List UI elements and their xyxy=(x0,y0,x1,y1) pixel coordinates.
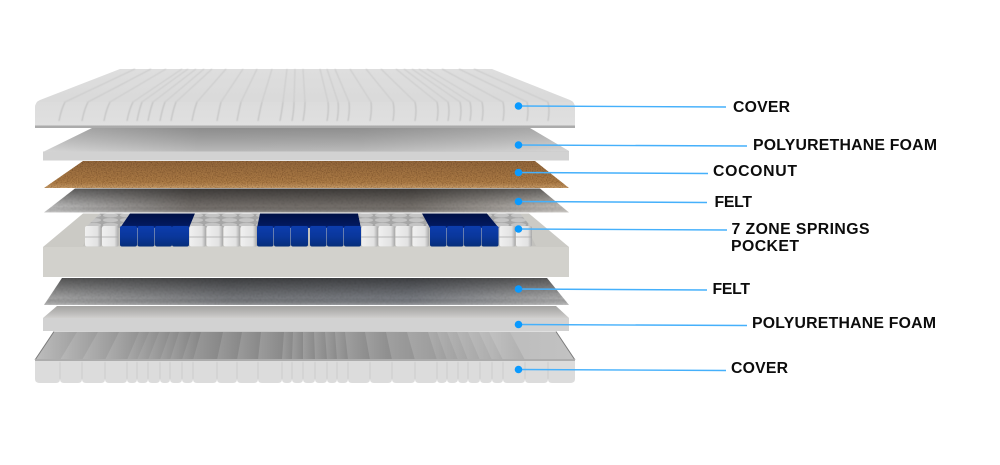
upper foam front face xyxy=(43,152,569,160)
coconut fibre sheet xyxy=(44,161,569,188)
back rows of springs xyxy=(85,214,532,228)
label: POLYURETHANE FOAM xyxy=(753,137,937,154)
marker dot xyxy=(515,366,522,373)
marker dot xyxy=(515,169,522,176)
foam frame top surface xyxy=(43,214,569,247)
callout: felt lower xyxy=(515,281,750,298)
spring well recess xyxy=(83,214,536,246)
callout: felt xyxy=(515,194,752,211)
leader line xyxy=(518,324,747,326)
leader line xyxy=(518,229,727,230)
leader line xyxy=(518,202,707,203)
lower felt shading xyxy=(44,278,569,305)
layer: top cover xyxy=(35,69,575,128)
top cover quilting ribs xyxy=(59,102,549,121)
leader line xyxy=(518,106,726,107)
callout: cover xyxy=(515,99,791,116)
bottom cover scalloped front xyxy=(35,360,575,383)
layer: bottom cover xyxy=(35,332,575,383)
callout: 7 zone springs pocket xyxy=(515,221,870,255)
marker dot xyxy=(515,321,522,328)
layer: pocket springs block xyxy=(43,214,569,277)
top cover upper surface xyxy=(35,69,575,127)
bottom cover wave ribs xyxy=(35,332,525,360)
upper felt shading xyxy=(44,188,569,212)
leader line xyxy=(518,145,747,146)
callout: coconut xyxy=(515,163,797,180)
layer: polyurethane foam lower xyxy=(43,306,569,331)
bottom cover inner surface xyxy=(35,332,575,360)
marker dot xyxy=(515,102,522,110)
label: COVER xyxy=(731,360,789,377)
layer: coconut xyxy=(44,161,569,188)
lower foam top surface xyxy=(43,306,569,318)
callout: polyurethane foam xyxy=(515,137,937,154)
label: FELT xyxy=(712,281,750,298)
leader line xyxy=(518,370,726,371)
label: 7 ZONE SPRINGS xyxy=(732,221,870,238)
bottom cover seam xyxy=(35,359,575,361)
marker dot xyxy=(515,225,522,233)
bottom cover front seams xyxy=(60,362,548,379)
label: POCKET xyxy=(731,238,799,255)
label: POLYURETHANE FOAM xyxy=(752,315,936,332)
leader line xyxy=(518,172,708,174)
layer: felt lower xyxy=(44,278,569,305)
layer: polyurethane foam upper xyxy=(43,128,569,160)
layer: felt upper xyxy=(44,188,569,212)
callout: cover lower xyxy=(515,360,789,377)
top cover bottom seam xyxy=(35,126,575,128)
leader line xyxy=(518,289,707,290)
callout: polyurethane foam lower xyxy=(515,315,936,332)
foam frame front face xyxy=(43,247,569,277)
marker dot xyxy=(515,198,522,205)
upper foam top surface xyxy=(43,128,569,152)
lower felt base xyxy=(44,278,569,305)
top cover surface ribs xyxy=(65,69,548,102)
lower foam front face xyxy=(43,318,569,331)
upper felt base xyxy=(44,188,569,212)
front row of springs xyxy=(85,226,532,246)
label: COCONUT xyxy=(713,163,797,180)
top cover front face xyxy=(35,102,575,126)
bottom cover dark side edges xyxy=(35,332,575,360)
label: COVER xyxy=(733,99,791,116)
marker dot xyxy=(515,285,522,293)
label: FELT xyxy=(714,194,752,211)
marker dot xyxy=(515,141,522,149)
